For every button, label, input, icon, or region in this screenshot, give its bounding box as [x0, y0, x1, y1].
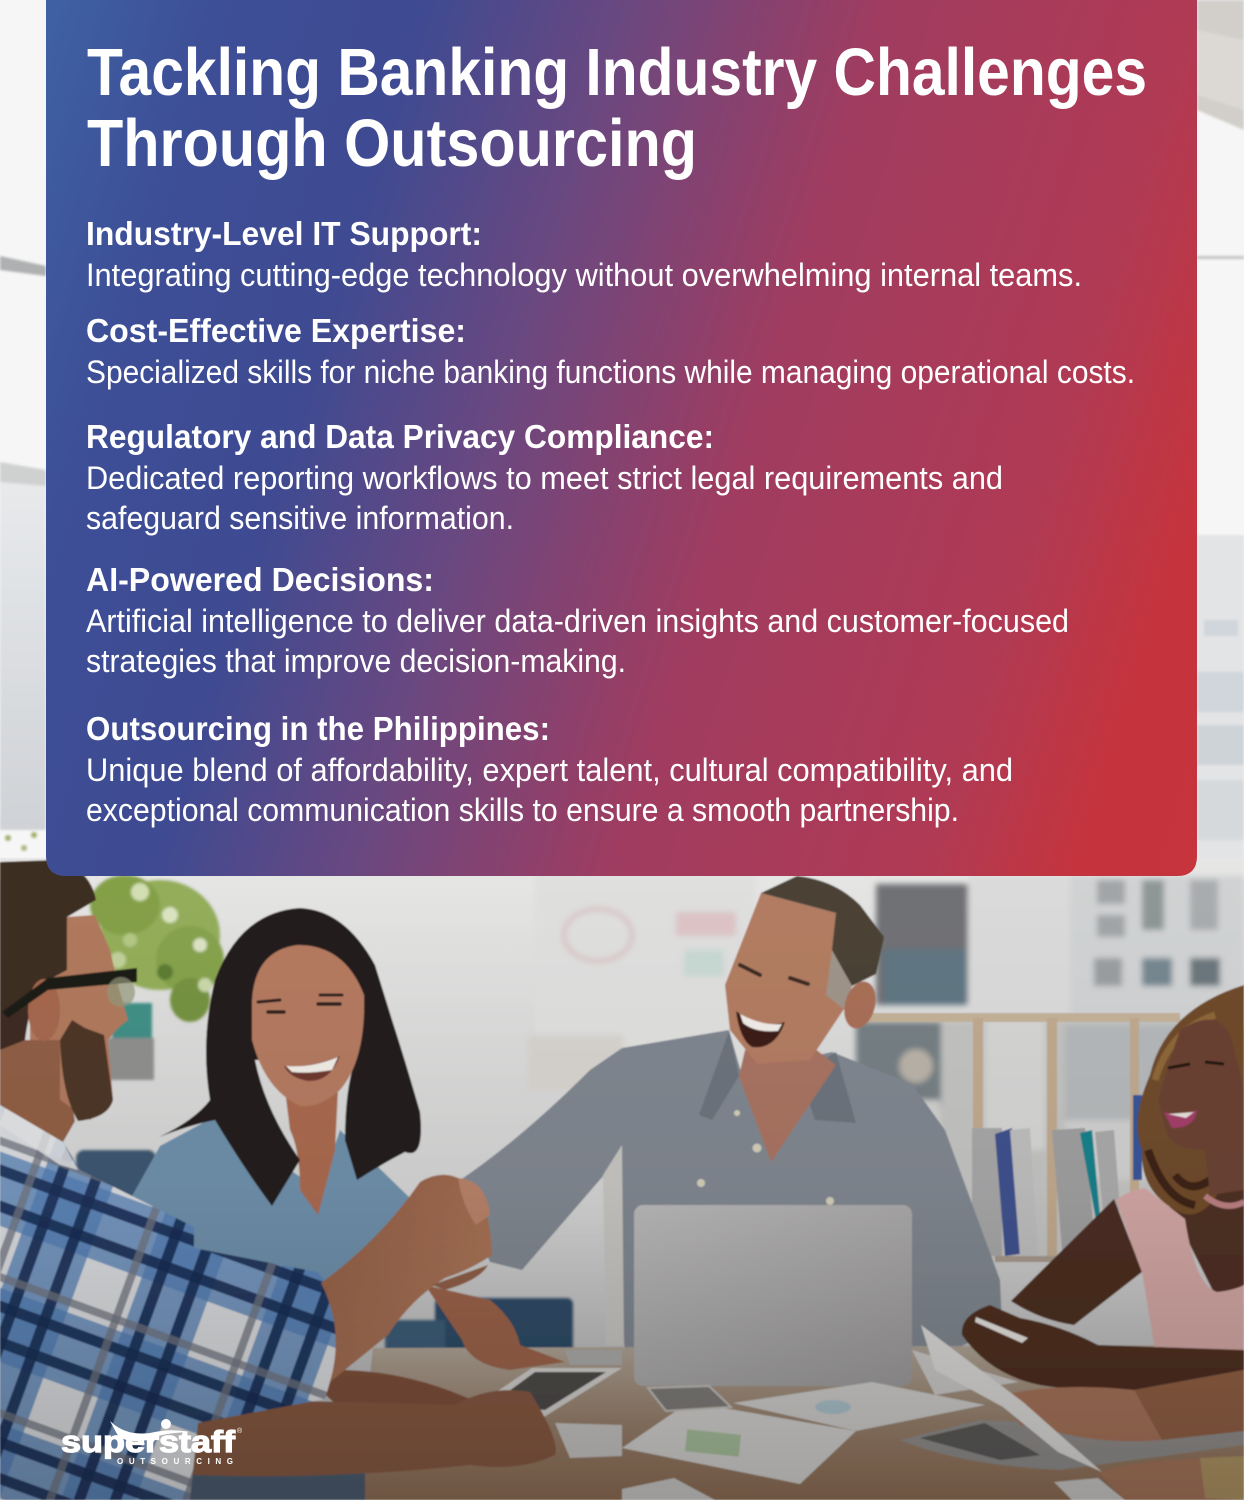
- forearms of man on table: [190, 1370, 556, 1476]
- office photo: meeting and handshake: [0, 858, 1244, 1500]
- text block: Outsourcing in the Philippines: [86, 710, 1013, 828]
- logo: superstaff outsourcing: ®: [237, 1427, 243, 1435]
- denim below forearm: [190, 1465, 365, 1500]
- man in plaid shirt: [0, 1100, 343, 1500]
- text block: Regulatory and Data Privacy Compliance: safeguard sensitive information.: [86, 500, 514, 536]
- text block: Cost-Effective Expertise: [86, 312, 1135, 390]
- whiteboard: [528, 876, 755, 1090]
- logo: superstaff outsourcing: superstaff: [61, 1424, 236, 1459]
- plant: [90, 875, 224, 1080]
- right woman: [921, 985, 1244, 1472]
- logo: superstaff outsourcing: OUTSOURCING: [117, 1457, 233, 1466]
- sofa: [76, 1150, 573, 1360]
- text block: Regulatory and Data Privacy Compliance: [86, 418, 1003, 536]
- table: [355, 1205, 1244, 1500]
- text block: Outsourcing in the Philippines: Unique blend of affordability, expert talent, cultural compatibility, and: [86, 752, 1013, 788]
- logo: superstaff outsourcing: [61, 1419, 243, 1466]
- text block: AI-Powered Decisions: strategies that improve decision-making.: [86, 643, 626, 679]
- woman hair and denim shirt: [127, 908, 421, 1300]
- woman arm to tablet: [425, 1285, 565, 1370]
- handshake arm: [321, 1175, 492, 1382]
- wooden shelf: [850, 1013, 1180, 1262]
- text block: Industry-Level IT Support: [86, 215, 1082, 293]
- background office photo, upper strips: [0, 0, 1244, 880]
- text block: Regulatory and Data Privacy Compliance: Dedicated reporting workflows to meet strict legal requirements and: [86, 460, 1003, 496]
- bottom hand right: [1098, 1458, 1244, 1500]
- vignette shading: [0, 876, 1244, 1500]
- tablet left: [468, 1368, 622, 1417]
- text block: Cost-Effective Expertise: Cost-Effective Expertise:: [86, 312, 466, 349]
- man in plaid head: [0, 860, 137, 1142]
- papers: [912, 1350, 1019, 1395]
- phone: [648, 1386, 731, 1411]
- text block: Industry-Level IT Support: Industry-Level IT Support:: [86, 215, 482, 252]
- text block: Industry-Level IT Support: Integrating cutting-edge technology without overwhelming internal teams.: [86, 257, 1082, 293]
- text block: Outsourcing in the Philippines: exceptional communication skills to ensure a smooth partnership.: [86, 792, 959, 828]
- face: [1158, 1020, 1244, 1195]
- gradient text panel: [46, 0, 1197, 876]
- text block: AI-Powered Decisions: [86, 561, 1069, 679]
- title: [87, 35, 1147, 181]
- curly hair: [1138, 985, 1244, 1214]
- back wall: [0, 858, 1244, 1500]
- laptop: [634, 1205, 912, 1386]
- laughing man shirt: [456, 1030, 1002, 1350]
- text block: AI-Powered Decisions: AI-Powered Decisions:: [86, 561, 434, 598]
- text block: Regulatory and Data Privacy Compliance: Regulatory and Data Privacy Compliance:: [86, 418, 714, 455]
- title: Through Outsourcing: [87, 106, 697, 181]
- text block: AI-Powered Decisions: Artificial intelligence to deliver data-driven insights and customer-focused: [86, 603, 1069, 639]
- text block: Cost-Effective Expertise: Specialized skills for niche banking functions while managing operational costs.: [86, 354, 1135, 390]
- text block: Outsourcing in the Philippines: Outsourcing in the Philippines:: [86, 710, 550, 747]
- tablet right: [900, 1420, 1244, 1470]
- laughing man head: [725, 876, 884, 1064]
- windows and buildings: [845, 876, 1244, 1260]
